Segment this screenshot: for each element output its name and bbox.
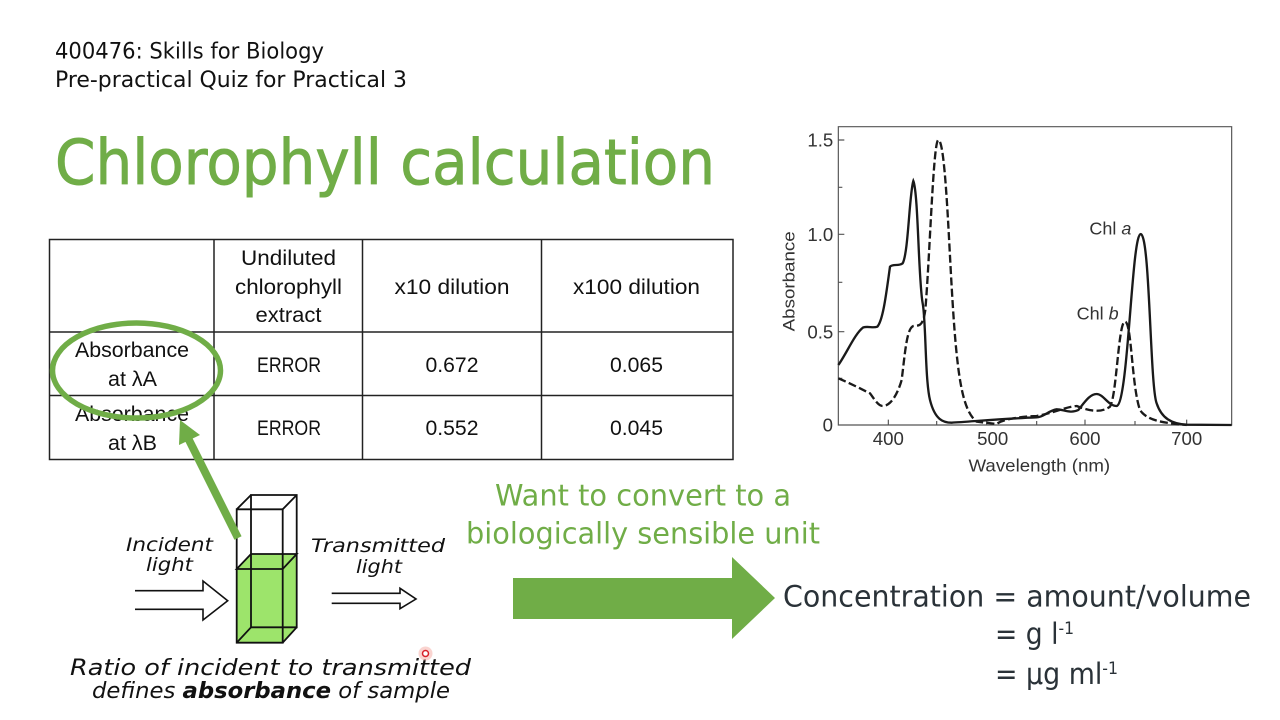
diagram labels: defines absorbance of sample (92, 679, 450, 704)
course heading: 400476: Skills for Biology (55, 40, 324, 64)
absorbance table: Absorbance (75, 403, 189, 426)
absorbance table: 0.552 (426, 417, 478, 440)
diagram labels: light (146, 554, 195, 576)
absorbance table (50, 240, 733, 460)
concentration formula: -1 (1058, 619, 1074, 639)
absorbance table: 0.065 (610, 354, 663, 377)
absorbance table: x100 dilution (573, 276, 700, 299)
chart labels: 1.0 (807, 224, 833, 245)
absorbance table: Absorbance (75, 339, 189, 362)
diagram labels: Incident (126, 534, 215, 556)
absorbance table: extract (256, 304, 322, 327)
chart labels: 500 (977, 428, 1008, 449)
absorbance table: Undiluted (241, 247, 336, 270)
arrow: transmitted light (332, 588, 416, 609)
chart labels: 400 (873, 428, 904, 449)
chart labels: 700 (1171, 428, 1202, 449)
concentration formula (783, 580, 1251, 691)
title: Chlorophyll calculation (55, 126, 715, 199)
concentration formula: = g l (995, 617, 1064, 651)
absorbance spectrum chart (780, 127, 1232, 475)
big green arrow (513, 557, 775, 639)
arrow: incident light (135, 581, 228, 620)
chart labels: 1.5 (807, 130, 833, 151)
absorbance table: ERROR (257, 354, 321, 377)
concentration formula: -1 (1102, 659, 1118, 679)
chart labels (780, 130, 1202, 475)
curve: Chl a (838, 181, 1232, 425)
diagram labels (70, 534, 472, 704)
concentration formula: Concentration = amount/volume (783, 580, 1251, 614)
highlight ellipse (52, 323, 220, 418)
absorbance table: at λB (108, 432, 157, 455)
absorbance table: chlorophyll (235, 276, 342, 299)
absorbance table: ERROR (257, 417, 321, 440)
curve: Chl b (838, 140, 1187, 425)
chart labels: 0 (823, 415, 833, 436)
chart labels: Wavelength (nm) (968, 455, 1110, 475)
callout: convert unit: biologically sensible unit (466, 516, 820, 550)
cuvette diagram (70, 495, 472, 704)
callout: convert unit: Want to convert to a (495, 478, 791, 512)
absorbance table: at λA (108, 368, 157, 391)
chart labels: Chl b (1077, 303, 1119, 323)
course heading: Pre-practical Quiz for Practical 3 (55, 68, 407, 93)
chart labels: 0.5 (807, 321, 833, 342)
course heading (55, 40, 407, 93)
absorbance table: 0.672 (426, 354, 478, 377)
diagram labels: Transmitted (311, 535, 446, 557)
callout: convert unit (466, 478, 820, 550)
absorbance table: x10 dilution (394, 276, 510, 299)
arrow: cuvette to table (179, 420, 238, 538)
icon: cuvette (237, 495, 297, 643)
laser pointer dot (418, 646, 432, 660)
concentration formula: = μg ml (995, 657, 1111, 691)
chart labels: Chl a (1089, 219, 1131, 239)
absorbance table: 0.045 (610, 417, 663, 440)
diagram labels: Ratio of incident to transmitted (70, 656, 472, 681)
diagram labels: light (356, 556, 404, 578)
chart labels: 600 (1069, 428, 1101, 449)
chart labels: Absorbance (780, 231, 799, 331)
